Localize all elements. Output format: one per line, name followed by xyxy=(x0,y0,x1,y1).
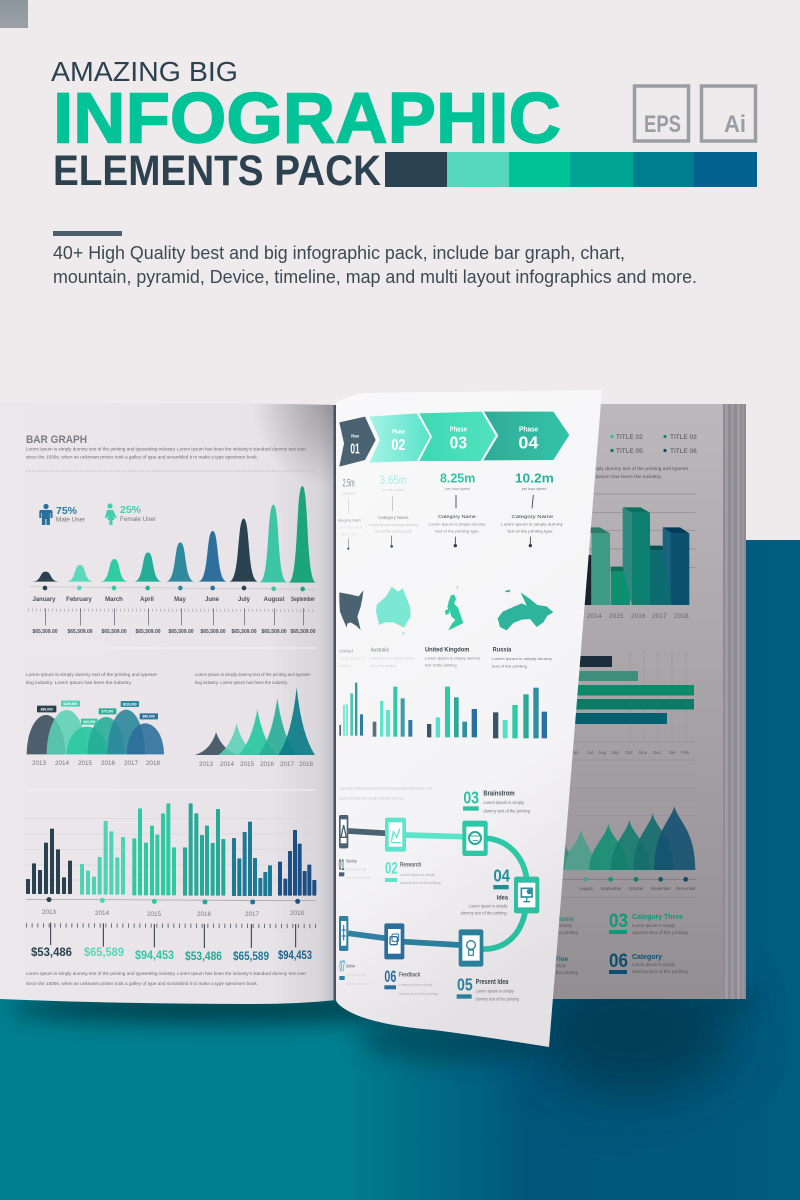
drop area chart months: December xyxy=(676,886,696,891)
3D bar chart years: 2016 xyxy=(631,613,646,620)
bell chart months: September xyxy=(291,597,316,603)
map: Australia xyxy=(376,587,411,635)
large bar chart years: 2016 xyxy=(197,911,211,918)
timeline intro: Lorem Ipsum is simply dummy text of the printing and typesetting industry. Lorem xyxy=(339,786,432,790)
stat: phase 4 xyxy=(501,471,563,547)
stat: phase 1: ategory Nam xyxy=(338,518,361,523)
intro text: mountain, pyramid, Device, timeline, map and multi layout infographics and more. xyxy=(53,267,697,287)
corner square xyxy=(0,0,28,28)
large bar chart years xyxy=(42,909,304,918)
bell chart values xyxy=(32,629,316,635)
step 1 label: Startup xyxy=(346,858,357,864)
large bar chart values: $65,589 xyxy=(233,949,269,963)
timeline connectors xyxy=(348,831,527,949)
bell chart values: $65,509.00 xyxy=(168,629,194,635)
drop area chart months: October xyxy=(628,886,644,891)
large bar chart years: 2013 xyxy=(42,909,56,916)
step 1 label: dummy text of the xyxy=(346,876,371,880)
bell chart months: July xyxy=(238,597,251,603)
mini chart 1 xyxy=(339,683,363,736)
label: Russia: Lorem Ipsum is simply dummy xyxy=(492,657,552,661)
icon: EPS file xyxy=(634,86,688,141)
step 6 label: 06 xyxy=(384,967,396,986)
map: United Kingdom xyxy=(445,587,463,630)
bell chart months: January xyxy=(32,597,56,603)
intro text xyxy=(53,243,697,287)
dome chart caption: ting industry. Lorem Ipsum has been the industry. xyxy=(26,680,132,686)
bell chart months: August xyxy=(264,597,284,603)
phase arrows: 03 xyxy=(450,432,467,452)
mountain chart xyxy=(195,687,315,755)
stat: phase 3: Category Name xyxy=(438,514,476,520)
category: three xyxy=(609,911,689,935)
country labels xyxy=(339,646,552,668)
bell chart months: February xyxy=(66,597,92,603)
3D bar chart years xyxy=(587,613,689,620)
bell chart values: $65,509.00 xyxy=(290,629,316,635)
bell chart months: April xyxy=(140,597,154,603)
icon: Ai file xyxy=(702,86,756,141)
category: six: dummy text of the printing xyxy=(632,969,689,974)
phase arrows xyxy=(339,412,569,467)
timeline intro xyxy=(339,786,432,800)
horizontal bar chart months: Aug xyxy=(598,750,606,755)
large bar chart values: $94,453 xyxy=(278,948,312,962)
step 5 label xyxy=(457,975,520,1002)
category: partly hidden labels: of the printing xyxy=(551,970,578,975)
stat: phase 1: 2.5m xyxy=(343,478,355,490)
step 3 label xyxy=(463,787,531,813)
book: curled front page xyxy=(336,390,602,1047)
stat: phase 4: text of the printing type xyxy=(507,529,553,534)
label: United Kingdom xyxy=(425,646,480,668)
background: teal floor xyxy=(0,540,800,1200)
mountain chart caption xyxy=(195,672,311,686)
legend: TITLE 02 xyxy=(616,434,643,441)
3D bar chart years: 2015 xyxy=(609,613,624,620)
category: six: Category xyxy=(632,954,662,961)
step 6 label: dummy text of the printing xyxy=(399,991,438,996)
title xyxy=(51,56,561,195)
label: United Kingdom: Lorem Ipsum is simply dummy xyxy=(425,656,480,660)
step 7 label: Lorem Ipsum is simply xyxy=(346,973,366,977)
category: partly hidden labels: is simply xyxy=(555,923,573,928)
legend: TITLE 03 xyxy=(670,434,697,441)
process timeline xyxy=(339,786,539,1002)
category: partly hidden labels: Category Name xyxy=(526,916,574,923)
stat: phase 3: 8.25m xyxy=(440,472,475,486)
label: Russia xyxy=(492,646,552,668)
stat: phase 4: Category Name xyxy=(511,514,553,520)
page stack edge xyxy=(700,404,746,999)
bell chart values: $65,509.00 xyxy=(231,629,257,635)
large bar chart xyxy=(24,803,316,948)
phase stats xyxy=(337,471,563,550)
bell chart months: June xyxy=(205,597,220,603)
stat: phase 3: Lorem Ipsum is simply dummy xyxy=(429,522,485,527)
large bar chart years: 2018 xyxy=(290,910,304,917)
stat: phase 2: per hour speed xyxy=(382,488,405,492)
step 5 label: 05 xyxy=(457,975,473,995)
dome chart: $80,000 xyxy=(41,707,53,711)
mini chart 2 xyxy=(373,687,412,737)
back page text: m Ipsum has been the industry. xyxy=(590,474,662,479)
horizontal bar chart months: Sep xyxy=(611,750,619,755)
label: United States: Lorem Ipsum is xyxy=(339,657,364,661)
male user stat xyxy=(39,504,86,525)
step 5 label: dummy text of the printing xyxy=(476,997,520,1002)
dome chart years: 2018 xyxy=(146,760,160,767)
dome chart years xyxy=(32,760,160,767)
horizontal bar chart months: Feb xyxy=(681,750,689,755)
label: Australia: text of the printing xyxy=(371,664,396,668)
bell chart values: $65,509.00 xyxy=(261,629,287,635)
label: Russia: text of the printing xyxy=(492,664,527,668)
stat: phase 2: Category Name xyxy=(378,515,409,520)
drop area chart xyxy=(550,774,696,898)
dome chart xyxy=(27,701,164,754)
stat: phase 1: per hour xyxy=(342,491,356,495)
bell chart values: $65,509.00 xyxy=(200,629,226,635)
category: partly hidden labels xyxy=(525,916,578,975)
horizontal bar chart months: Jun xyxy=(571,750,579,755)
back page text: simply dummy text of the printing and typeset xyxy=(590,466,689,471)
intro paragraph: since the 1500s, when an unknown printer took a galley of type and scrambled it to make a type specimen book. xyxy=(26,454,258,460)
category: three: Category Three xyxy=(632,914,683,921)
category: six: Lorem Ipsum is simply xyxy=(632,962,676,967)
colour palette bar xyxy=(385,152,757,187)
3D bar chart years: 2014 xyxy=(587,613,602,620)
stat: phase 4: Lorem Ipsum is simply dummy xyxy=(501,522,563,527)
dome chart: $100,000 xyxy=(63,702,77,706)
label: Australia: Lorem Ipsum is simply dummy xyxy=(371,657,414,661)
dome chart years: 2016 xyxy=(101,760,115,767)
step 2 label xyxy=(385,858,441,885)
step 7 label: Deliver xyxy=(346,963,355,969)
bell chart values: $65,509.00 xyxy=(32,629,58,635)
step 2 box xyxy=(385,818,406,852)
footer paragraph xyxy=(26,971,306,986)
accent rule xyxy=(53,231,122,236)
step 1 label xyxy=(339,857,371,880)
stat: phase 1 xyxy=(337,478,362,550)
label: Russia: Russia xyxy=(493,646,512,653)
step 5 label: Lorem Ipsum is simply xyxy=(476,988,515,993)
bell chart values: $65,509.00 xyxy=(67,629,93,635)
stat: phase 4: per hour speed xyxy=(522,487,546,491)
drop area chart months: November xyxy=(651,886,671,891)
stat: phase 1: Lorem Ipsum is xyxy=(337,525,362,529)
timeline intro: Ipsum has been the industry standard text ever xyxy=(339,796,405,800)
mountain chart caption: ting industry. Lorem Ipsum has been the industry. xyxy=(195,680,288,686)
step 4 label: 04 xyxy=(493,866,510,886)
title line: elements pack: ELEMENTS PACK xyxy=(53,147,381,195)
step 3 label: 03 xyxy=(463,787,479,807)
book: back right page xyxy=(525,404,746,999)
mountain chart years: 2015 xyxy=(240,761,254,768)
background: pale wall xyxy=(0,0,800,540)
country maps xyxy=(339,587,553,635)
footer paragraph: Lorem Ipsum is simply dummy text of the printing and typesetting industry. Lorem Ipsum has been the industry's standard dummy text ever xyxy=(26,971,306,976)
step 4 label xyxy=(461,866,510,916)
stat: phase 2: text of the printing type xyxy=(375,530,412,534)
bell chart values: $65,509.00 xyxy=(135,629,161,635)
step 6 box xyxy=(384,923,404,959)
step 2 label: dummy text of the printing xyxy=(400,880,441,885)
category: six xyxy=(609,951,689,974)
label: Australia: Australia xyxy=(371,648,390,654)
back page text xyxy=(590,466,689,479)
mountain chart caption: Lorem Ipsum is simply dummy text of the printing and typeset- xyxy=(195,672,311,678)
dome chart years: 2014 xyxy=(55,760,69,767)
step 3 label: Lorem Ipsum is simply xyxy=(483,800,525,805)
large bar chart values: $53,486 xyxy=(31,945,72,959)
horizontal bar chart months: Jan xyxy=(668,750,676,755)
icon: Ai file: Ai xyxy=(724,111,746,138)
mountain chart years xyxy=(199,761,313,768)
dome chart years: 2015 xyxy=(78,760,92,767)
bell chart xyxy=(28,486,316,625)
front page sheet xyxy=(336,390,602,1047)
label: Australia xyxy=(371,648,414,668)
stat: phase 2 xyxy=(369,473,418,548)
dome chart caption xyxy=(26,672,158,686)
map: Russia xyxy=(498,590,553,630)
spine shading xyxy=(240,404,336,500)
large bar chart years: 2015 xyxy=(147,911,161,918)
horizontal bar chart months: Oct xyxy=(625,750,633,755)
book: left page xyxy=(0,403,336,1004)
icon: EPS file: EPS xyxy=(644,111,681,138)
dome chart: $60,000 xyxy=(143,715,155,719)
step 7 label: 07 xyxy=(339,959,345,976)
female user stat xyxy=(105,503,157,525)
label: United Kingdom: United Kingdom xyxy=(425,646,470,653)
step 6 label: Feedback xyxy=(399,971,421,978)
dome chart years: 2013 xyxy=(32,760,46,767)
step 7 label xyxy=(339,959,370,986)
phase arrows: 02 xyxy=(391,437,405,454)
dome chart caption: Lorem Ipsum is simply dummy text of the printing and typeset- xyxy=(26,672,158,678)
intro paragraph xyxy=(26,446,306,460)
label: United States: United xyxy=(339,648,353,654)
label: United States xyxy=(339,648,364,668)
stat: phase 1: text of the xyxy=(341,533,357,537)
phase arrows: Phase xyxy=(519,425,538,434)
stat: phase 4: 10.2m xyxy=(515,471,554,486)
legend xyxy=(610,434,697,455)
bell chart months: May xyxy=(174,597,186,603)
category: partly hidden labels: of the printing xyxy=(551,930,578,935)
footer paragraph: since the 1500s, when an unknown printer took a galley of type and scrambled it to make a type specimen book. xyxy=(26,981,258,986)
step 1 box xyxy=(339,815,348,848)
mountain chart years: 2016 xyxy=(260,761,274,768)
phase arrows: Phase xyxy=(392,428,405,435)
female user stat: Female User xyxy=(120,516,157,523)
stat: phase 2: 3.65m xyxy=(380,473,407,487)
left page sheet xyxy=(0,403,336,1004)
category: three: 03 xyxy=(609,911,628,932)
category: six: 06 xyxy=(609,951,628,972)
legend: TITLE 06 xyxy=(670,448,697,455)
mountain chart years: 2013 xyxy=(199,761,213,768)
large bar chart years: 2014 xyxy=(95,910,109,917)
step 3 box xyxy=(462,821,488,856)
step 3 label: Brainstrom xyxy=(483,790,515,797)
step 7 label: dummy text of the xyxy=(346,982,370,986)
drop area chart months: August xyxy=(579,886,593,891)
3D bar chart years: 2017 xyxy=(652,613,667,620)
title line: amazing big: AMAZING BIG xyxy=(51,56,238,87)
step 7 box xyxy=(339,916,348,951)
horizontal bar chart xyxy=(570,650,695,760)
step 3 label: dummy text of the printing xyxy=(483,808,531,813)
step 2 label: Lorem Ipsum is simply xyxy=(400,872,435,877)
label: United States: dummy xyxy=(339,664,351,668)
step 5 label: Present Idea xyxy=(476,979,508,986)
bell chart values: $65,509.00 xyxy=(101,629,127,635)
step 2 label: 02 xyxy=(385,858,398,877)
phase arrows: 01 xyxy=(350,441,360,457)
step 6 label: Lorem Ipsum is simply xyxy=(399,982,432,987)
step 4 box xyxy=(514,877,539,913)
3D bar chart xyxy=(580,494,696,605)
category: three: dummy text of the printing xyxy=(632,930,689,935)
mini bar charts xyxy=(339,683,547,738)
male user stat: 75% xyxy=(56,505,78,517)
stat: phase 3 xyxy=(429,472,485,547)
step 1 label: 01 xyxy=(339,857,344,874)
map: United States xyxy=(339,590,363,630)
dome chart: $43,000 xyxy=(83,720,95,724)
horizontal bar chart months: Dec xyxy=(653,750,662,755)
dome chart years: 2017 xyxy=(124,760,138,767)
dome chart: $110,000 xyxy=(123,702,137,706)
drop area chart months xyxy=(579,886,696,891)
mountain chart years: 2014 xyxy=(220,761,234,768)
step 4 label: Lorem Ipsum is simply xyxy=(469,903,508,908)
drop area chart months: September xyxy=(600,886,622,891)
step 5 box xyxy=(459,929,483,967)
legend: TITLE 05 xyxy=(616,448,643,455)
intro text: 40+ High Quality best and big infographic pack, include bar graph, chart, xyxy=(53,243,625,263)
category: partly hidden labels: is simply xyxy=(549,963,567,968)
step 4 label: dummy text of the printing xyxy=(461,911,507,916)
category: partly hidden labels: Category Five xyxy=(525,956,568,963)
stat: phase 2: Lorem Ipsum is simply dummy xyxy=(369,523,418,527)
horizontal bar chart months: Jul xyxy=(587,750,593,755)
phase arrows: 04 xyxy=(518,432,538,452)
mountain chart years: 2017 xyxy=(280,761,294,768)
horizontal bar chart months xyxy=(571,750,689,755)
heading: bar graph: BAR GRAPH xyxy=(26,434,87,446)
stat: phase 3: per hour speed xyxy=(445,487,470,491)
step 6 label xyxy=(384,967,438,996)
phase arrows: Phase xyxy=(450,425,467,434)
category: three: Lorem Ipsum is simply xyxy=(632,923,676,928)
back page sheet xyxy=(540,404,723,999)
bell chart months: March xyxy=(105,597,123,603)
large bar chart values xyxy=(31,945,312,963)
label: United Kingdom: text of the printing xyxy=(425,664,457,668)
step 4 label: Idea xyxy=(497,895,508,902)
spine line xyxy=(334,405,336,1000)
title line: infographic: INFOGRAPHIC xyxy=(53,80,561,158)
female user stat: 25% xyxy=(120,504,142,516)
step 1 label: Lorem Ipsum is simply xyxy=(346,868,366,872)
intro paragraph: Lorem Ipsum is simply dummy text of the printing and typesetting industry. Lorem Ipsum has been the industry's standard dummy text ever xyxy=(26,446,306,452)
large bar chart values: $94,453 xyxy=(135,948,174,962)
mini chart 4 xyxy=(493,688,547,738)
horizontal bar chart months: Nov xyxy=(639,750,648,755)
large bar chart values: $65,589 xyxy=(84,945,124,959)
mountain chart years: 2018 xyxy=(299,761,313,768)
phase arrows: Phase xyxy=(351,433,359,439)
3D bar chart years: 2018 xyxy=(674,613,689,620)
stat: phase 3: text of the printing type xyxy=(435,529,480,534)
dome chart: $75,000 xyxy=(101,710,113,714)
male user stat: Male User xyxy=(56,516,86,524)
step 2 label: Research xyxy=(400,862,421,869)
mini chart 3 xyxy=(427,687,477,737)
bell chart months xyxy=(32,597,316,603)
large bar chart years: 2017 xyxy=(245,911,259,918)
large bar chart values: $53,486 xyxy=(185,949,222,963)
